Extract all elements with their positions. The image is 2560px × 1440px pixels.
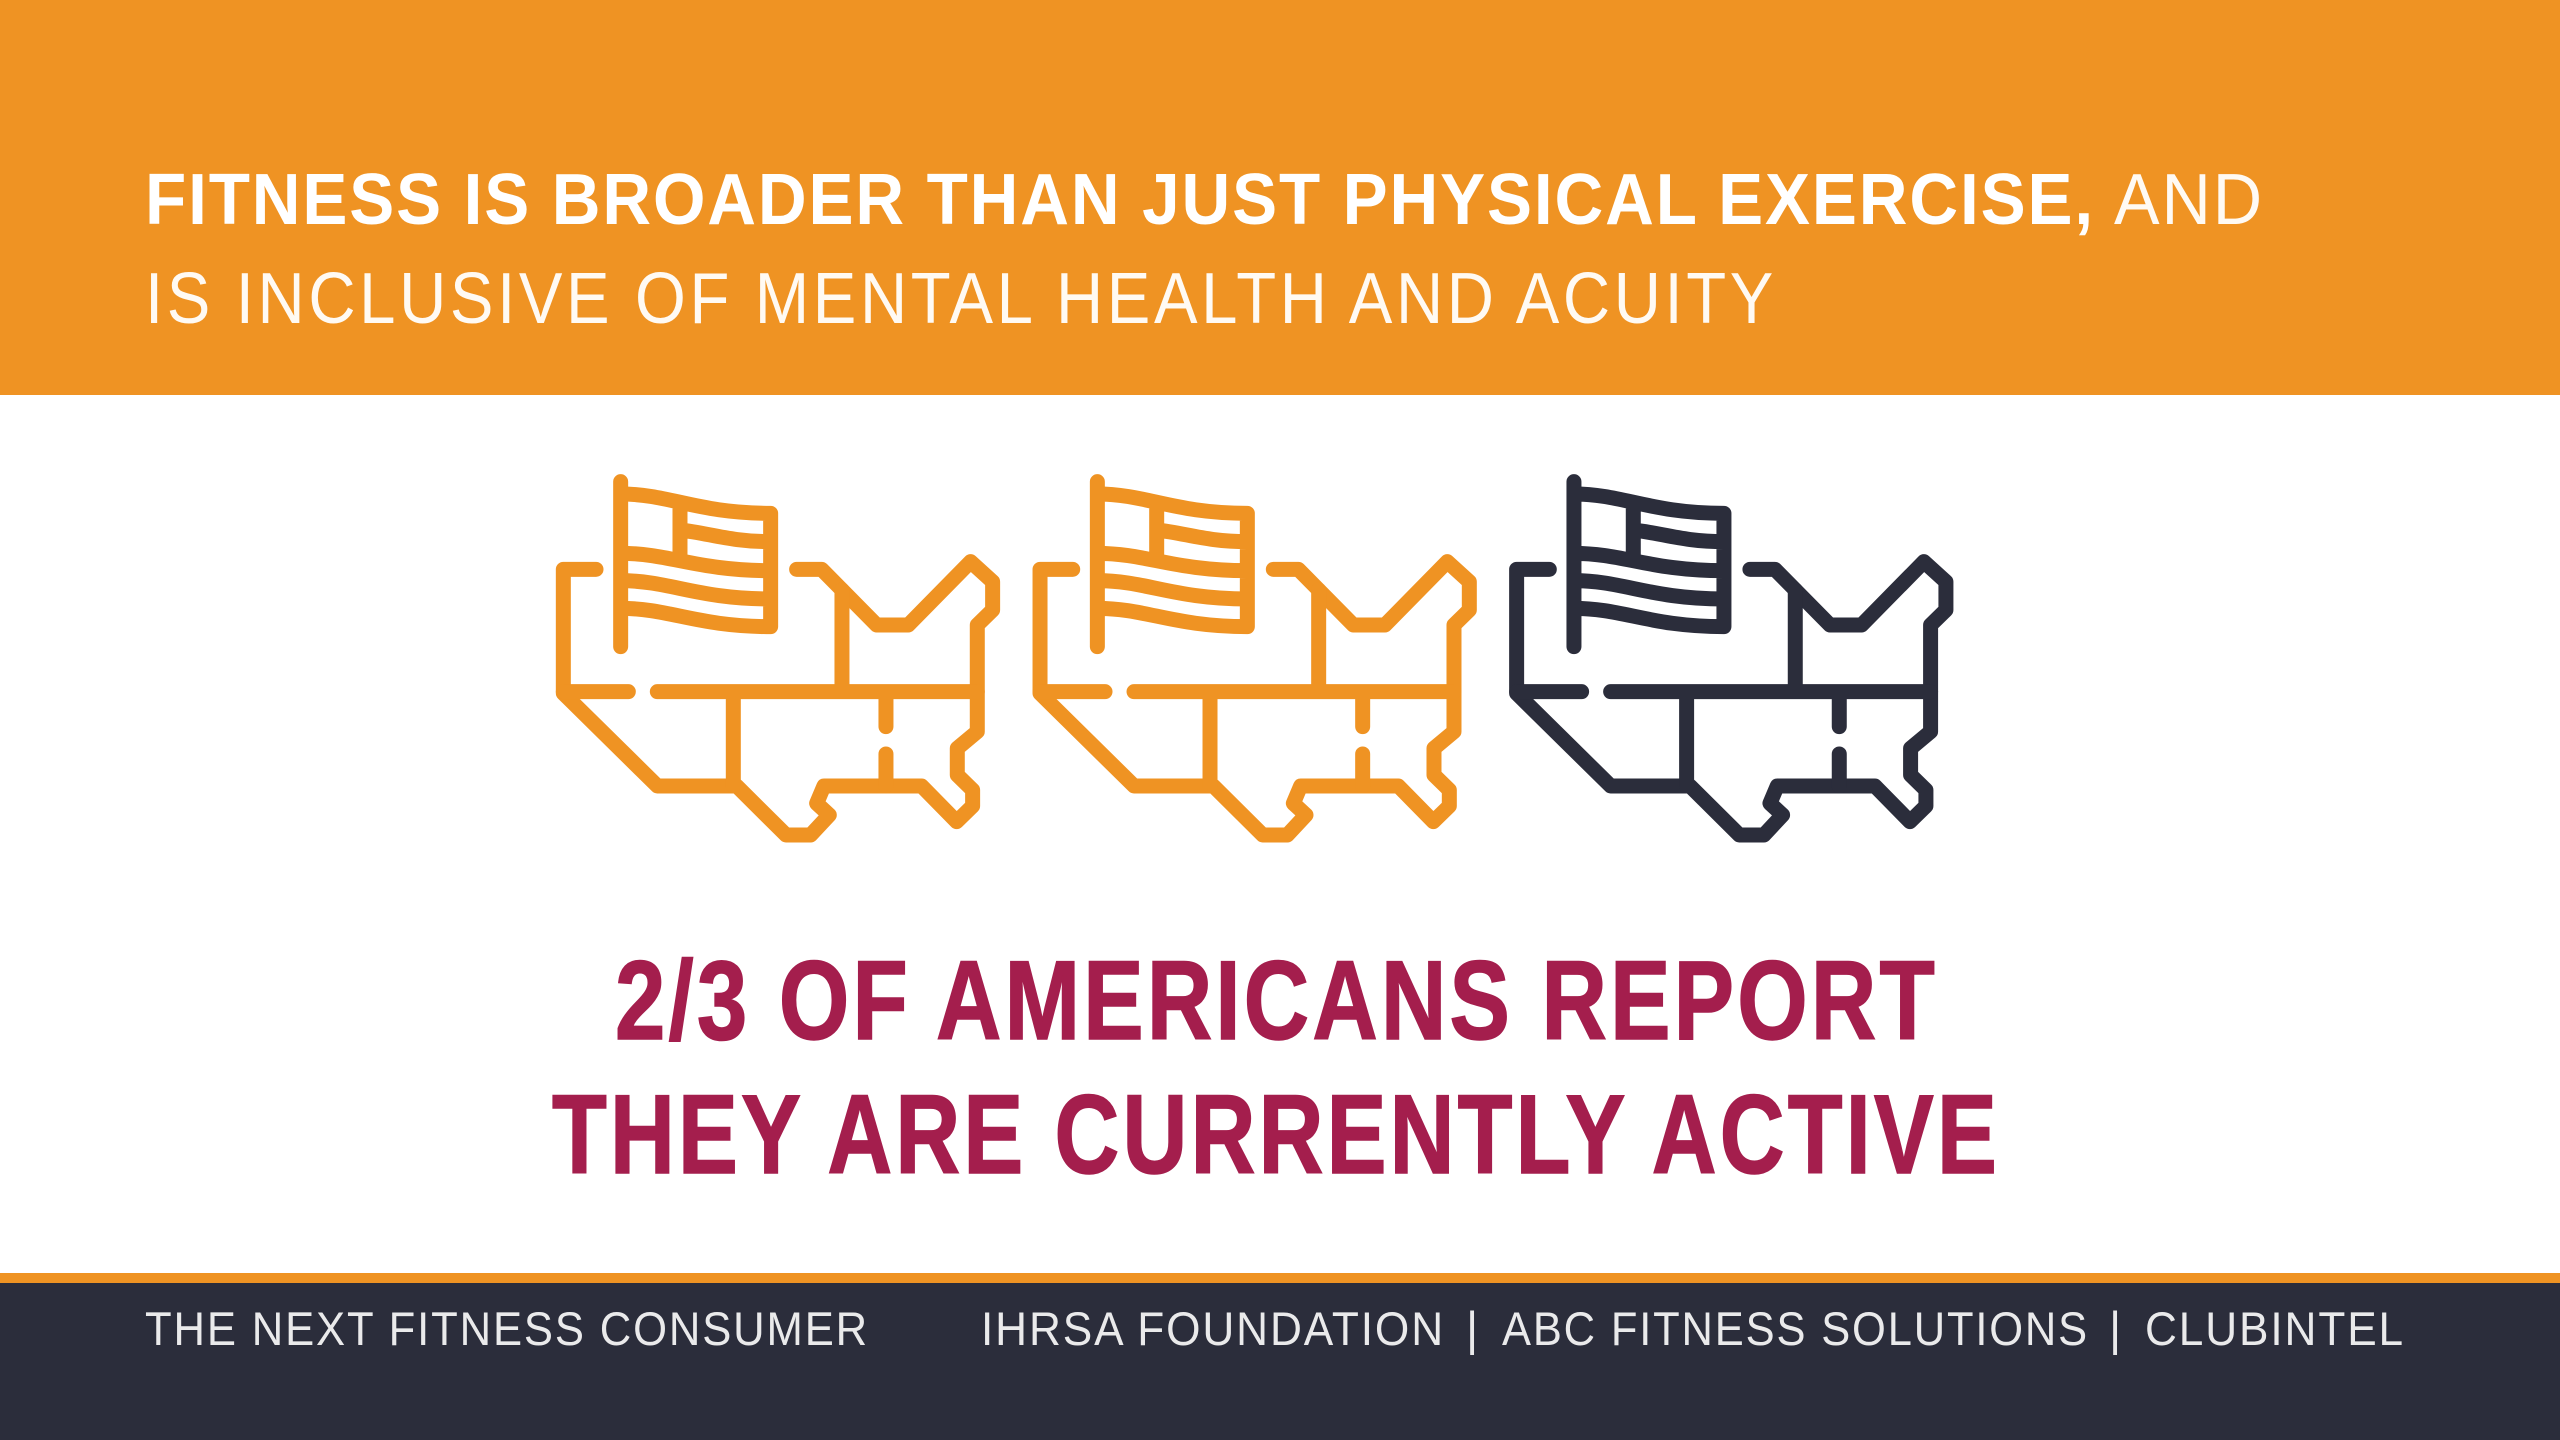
footer bar: [0, 1273, 2560, 1440]
footer credits: [981, 1302, 2405, 1355]
footer credits: |: [1466, 1302, 1480, 1355]
footer credits: |: [2109, 1302, 2123, 1355]
main statistic statement: [552, 938, 2000, 1197]
icon: US map with flag, orange 1: [563, 482, 993, 835]
icon: US map with flag, dark: [1517, 482, 1946, 835]
footer title: THE NEXT FITNESS CONSUMER: [145, 1302, 869, 1355]
header headline text: IS INCLUSIVE OF MENTAL HEALTH AND ACUITY: [145, 259, 1777, 339]
header banner: [0, 0, 2560, 395]
icon: US map with flag, orange 2: [1040, 482, 1469, 835]
footer credits: ABC FITNESS SOLUTIONS: [1502, 1302, 2089, 1355]
footer credits: CLUBINTEL: [2145, 1302, 2405, 1355]
main statistic statement: THEY ARE CURRENTLY ACTIVE: [552, 1072, 2000, 1197]
header headline text: FITNESS IS BROADER THAN JUST PHYSICAL EXERCISE,: [145, 160, 2095, 240]
header headline text: AND: [2114, 160, 2264, 240]
header headline text: [145, 160, 2264, 339]
main statistic statement: 2/3 OF AMERICANS REPORT: [615, 938, 1938, 1063]
footer credits: IHRSA FOUNDATION: [981, 1302, 1445, 1355]
